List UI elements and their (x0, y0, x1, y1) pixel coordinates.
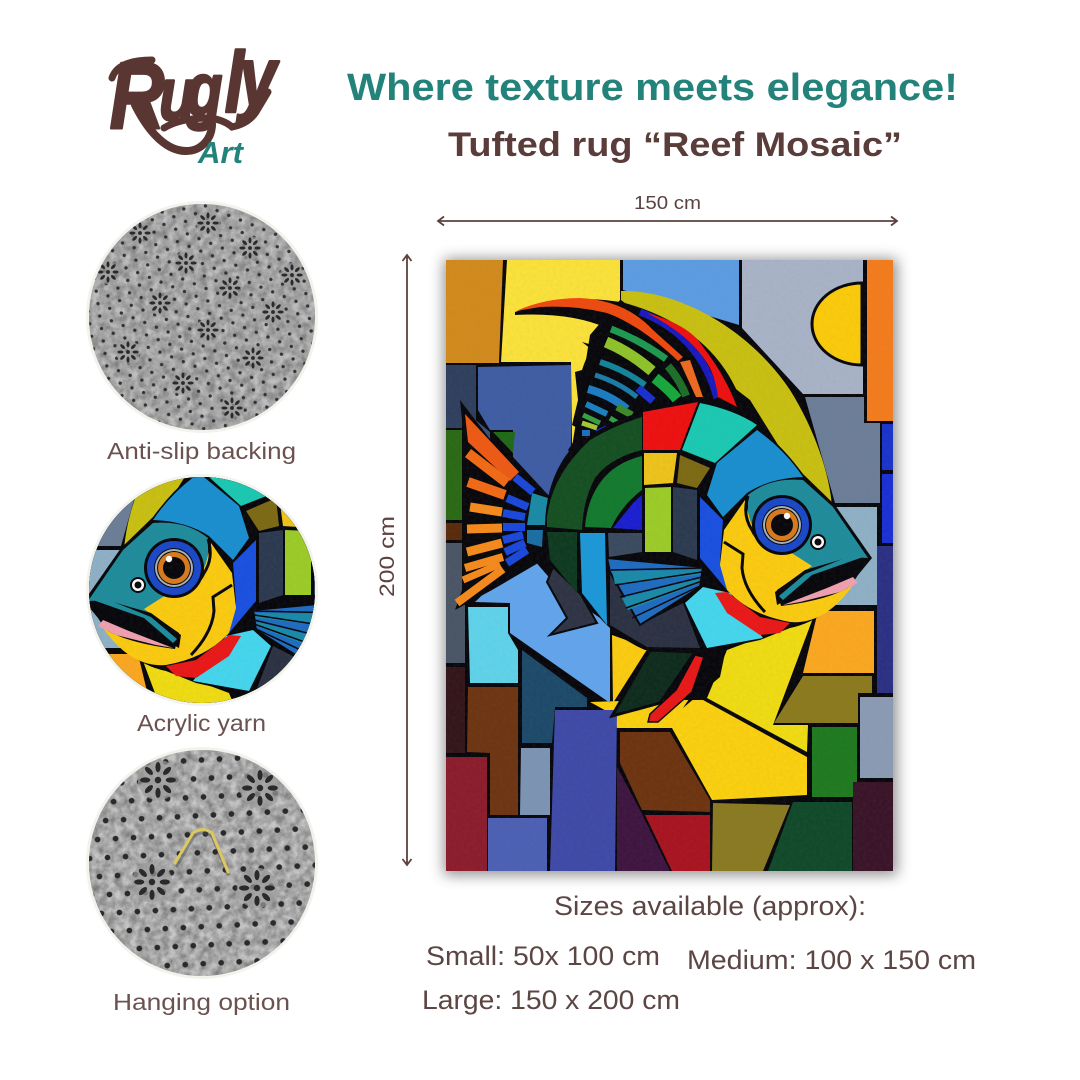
circle: anti-slip backing (86, 201, 318, 433)
size: small: Small: 50x 100 cm (426, 941, 660, 971)
circle: acrylic yarn detail (86, 474, 318, 706)
bottom fins (547, 567, 725, 722)
logo word: Rugly: u (159, 54, 195, 137)
label: acrylic yarn: Acrylic yarn (137, 710, 266, 736)
height dimension arrow (402, 255, 412, 865)
tail fin (455, 400, 552, 610)
width label: 150 cm (634, 192, 701, 213)
rug artwork: Reef Mosaic fish (446, 260, 893, 871)
size: large: Large: 150 x 200 cm (422, 985, 680, 1015)
logo word: Rugly: l (225, 35, 245, 131)
circle: hanging option (86, 747, 318, 979)
height label: 200 cm (376, 516, 399, 597)
dorsal fin (515, 298, 737, 452)
logo flourishes (112, 60, 268, 151)
pectoral fin (607, 558, 703, 625)
head and face (720, 480, 868, 622)
width dimension arrow (438, 216, 897, 226)
sizes heading: Sizes available (approx): (554, 891, 866, 921)
icon: wire hanger (175, 830, 228, 874)
label: anti-slip backing: Anti-slip backing (107, 438, 296, 464)
yellow half sun (812, 283, 862, 365)
body (545, 398, 872, 652)
logo: Rugly Art (110, 31, 280, 170)
heading: product name: Tufted rug “Reef Mosaic” (448, 126, 902, 164)
logo word: Rugly: R (110, 43, 164, 149)
rug shadow (444, 259, 897, 875)
size: medium: Medium: 100 x 150 cm (687, 945, 976, 975)
rug pile texture (446, 260, 893, 871)
heading: tagline: Where texture meets elegance! (347, 67, 958, 109)
olive arc behind fish (621, 291, 832, 507)
logo word: Rugly: g (186, 49, 223, 132)
fish (455, 298, 872, 722)
eye (752, 495, 812, 555)
background mosaic blocks (446, 260, 893, 871)
logo word: Art: Art (197, 135, 245, 170)
nostril (810, 534, 826, 550)
label: hanging option: Hanging option (113, 989, 290, 1015)
mouth (775, 557, 868, 605)
logo word: Rugly: y (236, 31, 280, 125)
